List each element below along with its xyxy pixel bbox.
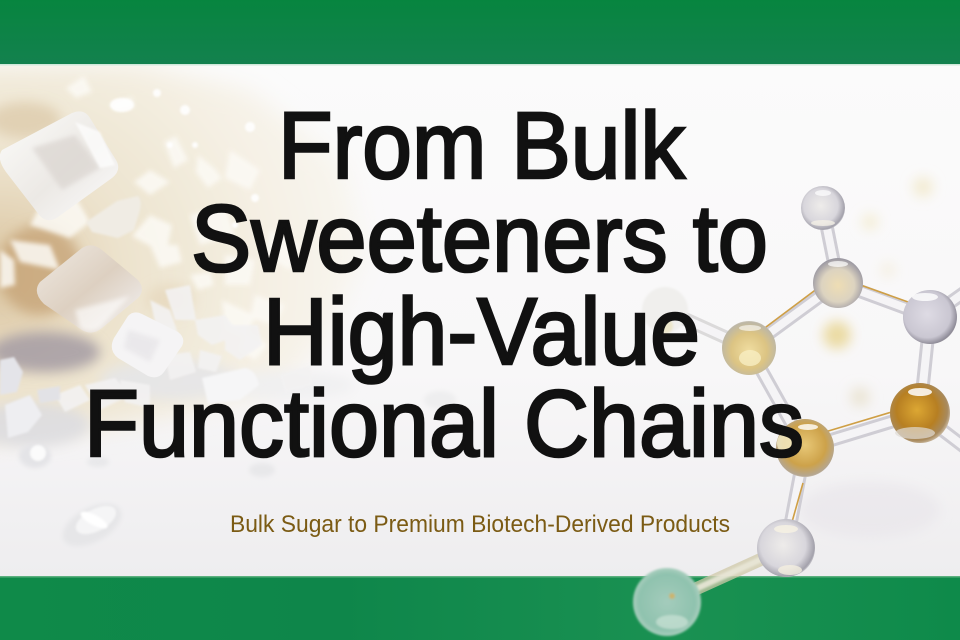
droplets on table [19, 391, 456, 555]
crystal cube large [0, 111, 118, 220]
molecule bonds [665, 208, 960, 602]
atom: foreground teal, blurred [633, 568, 701, 636]
title line 3: High-Value [263, 279, 700, 385]
title [84, 93, 804, 477]
bottom green band [0, 576, 960, 640]
atom: upper centre [813, 258, 863, 308]
molecule model [633, 177, 960, 636]
title line 1: From Bulk [278, 93, 685, 199]
crystal cube lower [112, 312, 183, 377]
crystal chunk upper [86, 196, 141, 238]
crystal cube middle [37, 245, 142, 333]
atom: right deep gold [890, 383, 950, 443]
blurred background atoms [800, 177, 940, 538]
title line 2: Sweeteners to [191, 186, 768, 292]
sparkles [110, 89, 294, 228]
atom: top [801, 186, 845, 230]
sugar crystal heap [0, 64, 456, 555]
atom: centre gold [776, 419, 834, 477]
heap body [0, 64, 365, 445]
atom: lower grey [757, 519, 815, 577]
atom: upper right [903, 290, 957, 344]
heap shadow tones [0, 102, 355, 447]
small sugar grains [0, 76, 300, 360]
top green band [0, 0, 960, 66]
crystal chunks lower left [0, 357, 259, 438]
atom: left gold [722, 321, 776, 375]
title line 4: Functional Chains [84, 371, 804, 477]
subtitle: Bulk Sugar to Premium Biotech-Derived Products [230, 511, 730, 538]
atom: far left, faint [642, 287, 688, 334]
lower crystal chunks [55, 285, 312, 412]
